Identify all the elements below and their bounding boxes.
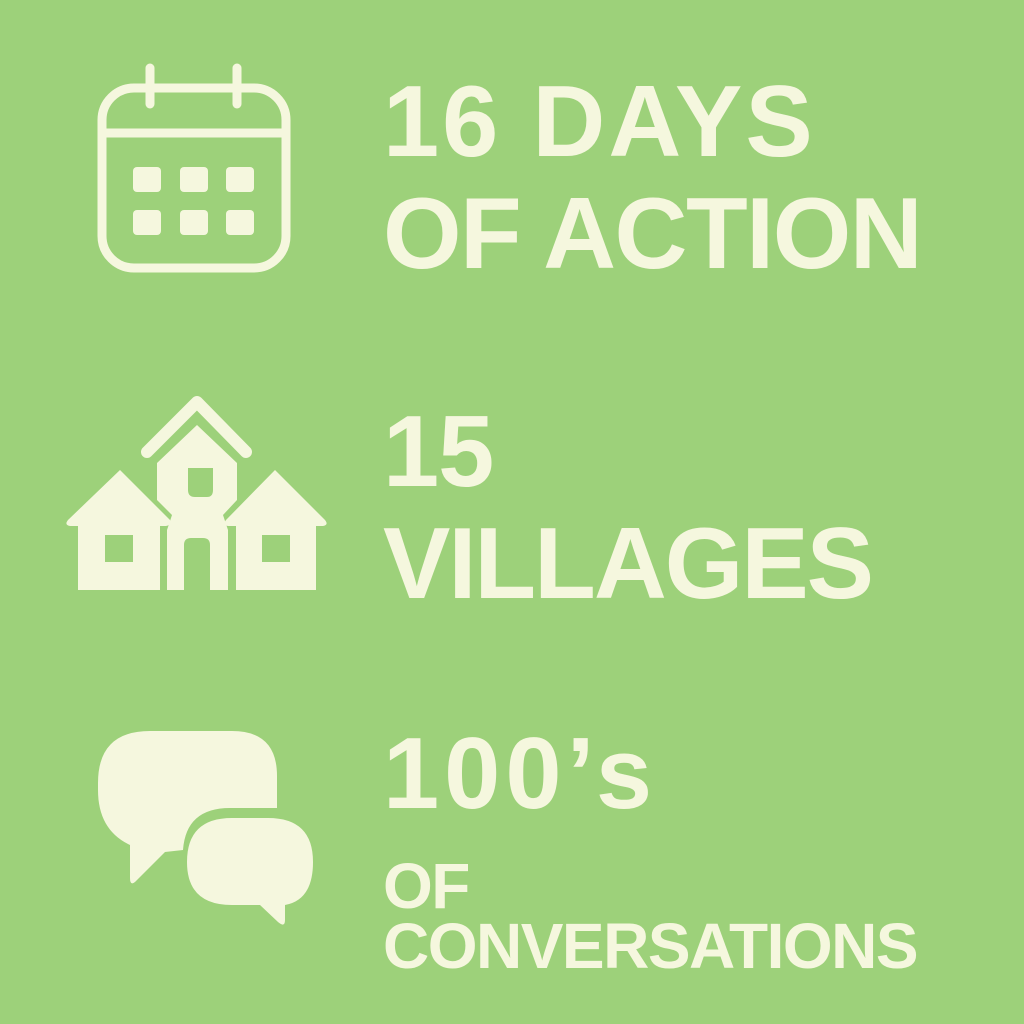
heading line 2 villages: VILLAGES — [383, 508, 872, 620]
icon: houses — [66, 402, 327, 590]
heading: 16 days of action: 16 DAYS — [383, 66, 816, 178]
icon: chat bubbles — [98, 731, 313, 925]
text: of: OF — [383, 850, 469, 922]
heading line 2: OF ACTION — [383, 178, 921, 290]
heading: 100's: 100’s — [383, 718, 657, 830]
heading: 15 villages: 15 — [383, 396, 493, 508]
text: conversations: CONVERSATIONS — [383, 910, 917, 982]
icon: calendar — [102, 68, 286, 268]
